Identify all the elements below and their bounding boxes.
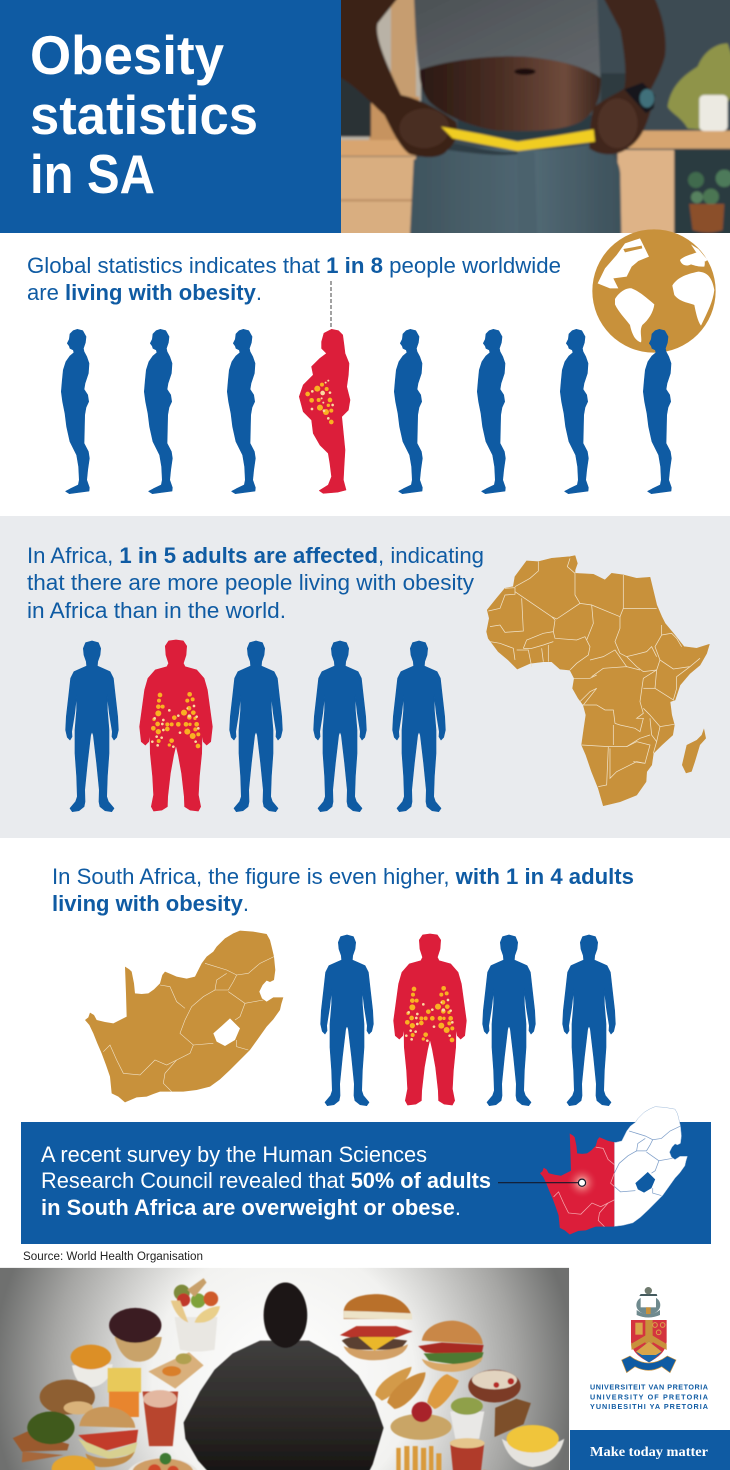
title: statistics <box>30 84 258 146</box>
university names: UNIVERSITY OF PRETORIA <box>590 1392 708 1402</box>
watch <box>624 83 655 113</box>
scroll <box>622 1356 676 1373</box>
person blue 7 <box>560 329 588 494</box>
fries <box>393 1446 441 1470</box>
map: half of South Africa highlighted <box>540 1107 687 1235</box>
map: South Africa <box>85 931 283 1102</box>
dashed pointer line <box>330 281 332 328</box>
green cake on toast <box>13 1412 75 1462</box>
person red with fat <box>140 640 212 811</box>
text: survey statement: in South Africa are overweight or obese. <box>41 1195 461 1220</box>
tagline band <box>570 1430 730 1470</box>
muffin <box>109 1308 162 1362</box>
person blue 5 <box>394 329 422 494</box>
person blue <box>66 641 118 812</box>
text: global statistics: are living with obesity. <box>27 280 262 305</box>
noodles <box>484 1470 562 1471</box>
text: South Africa statistic <box>52 864 634 916</box>
text: Africa statistic: that there are more people living with obesity <box>27 570 474 595</box>
text: survey statement: Research Council revealed that 50% of adults <box>41 1168 491 1193</box>
red drink <box>143 1390 178 1446</box>
fruit cup <box>171 1278 220 1352</box>
text: survey statement: A recent survey by the Human Sciences <box>41 1142 427 1167</box>
arms <box>331 0 457 157</box>
burger left <box>78 1407 138 1467</box>
pointer <box>498 1167 598 1199</box>
person blue 6 <box>477 329 505 494</box>
text: South Africa statistic: living with obesity. <box>52 891 249 916</box>
crest top: book and anchor <box>636 1287 660 1317</box>
panel: survey banner <box>21 1107 711 1244</box>
text: Africa statistic: in Africa than in the world. <box>27 598 286 623</box>
cookie and apple <box>391 1402 452 1440</box>
header title panel <box>0 0 341 233</box>
text: South Africa statistic: In South Africa, the figure is even higher, with 1 in 4 adults <box>52 864 634 889</box>
source: Source: World Health Organisation <box>23 1251 203 1263</box>
university names: YUNIBESITHI YA PRETORIA <box>590 1402 708 1411</box>
person red with fat <box>394 934 466 1105</box>
panel: Africa <box>0 516 730 838</box>
burger top right <box>340 1294 413 1360</box>
tape measure <box>441 127 595 151</box>
toast board <box>148 1352 204 1389</box>
salad bowl <box>127 1453 199 1470</box>
pants <box>408 144 623 233</box>
person blue <box>321 935 373 1106</box>
shirt <box>414 0 600 77</box>
person blue 1 <box>61 329 89 494</box>
text: Africa statistic: In Africa, 1 in 5 adults are affected, indicating <box>27 543 484 568</box>
icon: globe <box>592 229 716 353</box>
chart: 1 in 8 people row <box>61 329 671 494</box>
corn bowl <box>71 1345 113 1387</box>
salad dish <box>468 1370 521 1402</box>
person blue 2 <box>144 329 172 494</box>
drink <box>108 1368 141 1417</box>
burger right <box>418 1321 484 1372</box>
shield <box>631 1320 667 1362</box>
silhouette <box>184 1282 384 1470</box>
lower plant <box>688 170 730 232</box>
person blue <box>314 641 366 812</box>
photo: man surrounded by food <box>0 1261 578 1470</box>
map: Africa <box>487 556 709 806</box>
crest <box>622 1287 676 1373</box>
belly <box>419 56 601 131</box>
chart: 1 in 4 adults row <box>321 934 615 1106</box>
text: survey statement <box>41 1142 491 1220</box>
person blue <box>563 935 615 1106</box>
title <box>30 24 258 205</box>
upper plant <box>668 43 730 131</box>
green cup <box>450 1397 484 1439</box>
red drink right <box>450 1438 485 1470</box>
person blue <box>393 641 445 812</box>
university names: UNIVERSITEIT VAN PRETORIA <box>590 1382 708 1392</box>
person blue 3 <box>227 329 255 494</box>
photo: man measuring waist <box>331 0 730 247</box>
title: Obesity <box>30 24 224 86</box>
text: Africa statistic <box>27 543 484 623</box>
pasta bowl small <box>52 1456 95 1470</box>
logo panel: University of Pretoria <box>570 1287 730 1470</box>
text: global statistics <box>27 253 561 305</box>
person blue <box>483 935 535 1106</box>
pastry <box>40 1380 95 1414</box>
person red with fat <box>299 329 350 493</box>
meat on dish <box>494 1399 531 1437</box>
tagline band: Make today matter <box>590 1445 708 1460</box>
breads <box>375 1367 459 1409</box>
university names <box>590 1382 708 1411</box>
chart: 1 in 5 adults row <box>66 640 445 812</box>
text: global statistics: Global statistics indicates that 1 in 8 people worldwide <box>27 253 561 278</box>
person blue <box>230 641 282 812</box>
person blue 8 <box>643 329 671 494</box>
cheese bowl <box>502 1425 564 1467</box>
title: in SA <box>30 143 155 205</box>
